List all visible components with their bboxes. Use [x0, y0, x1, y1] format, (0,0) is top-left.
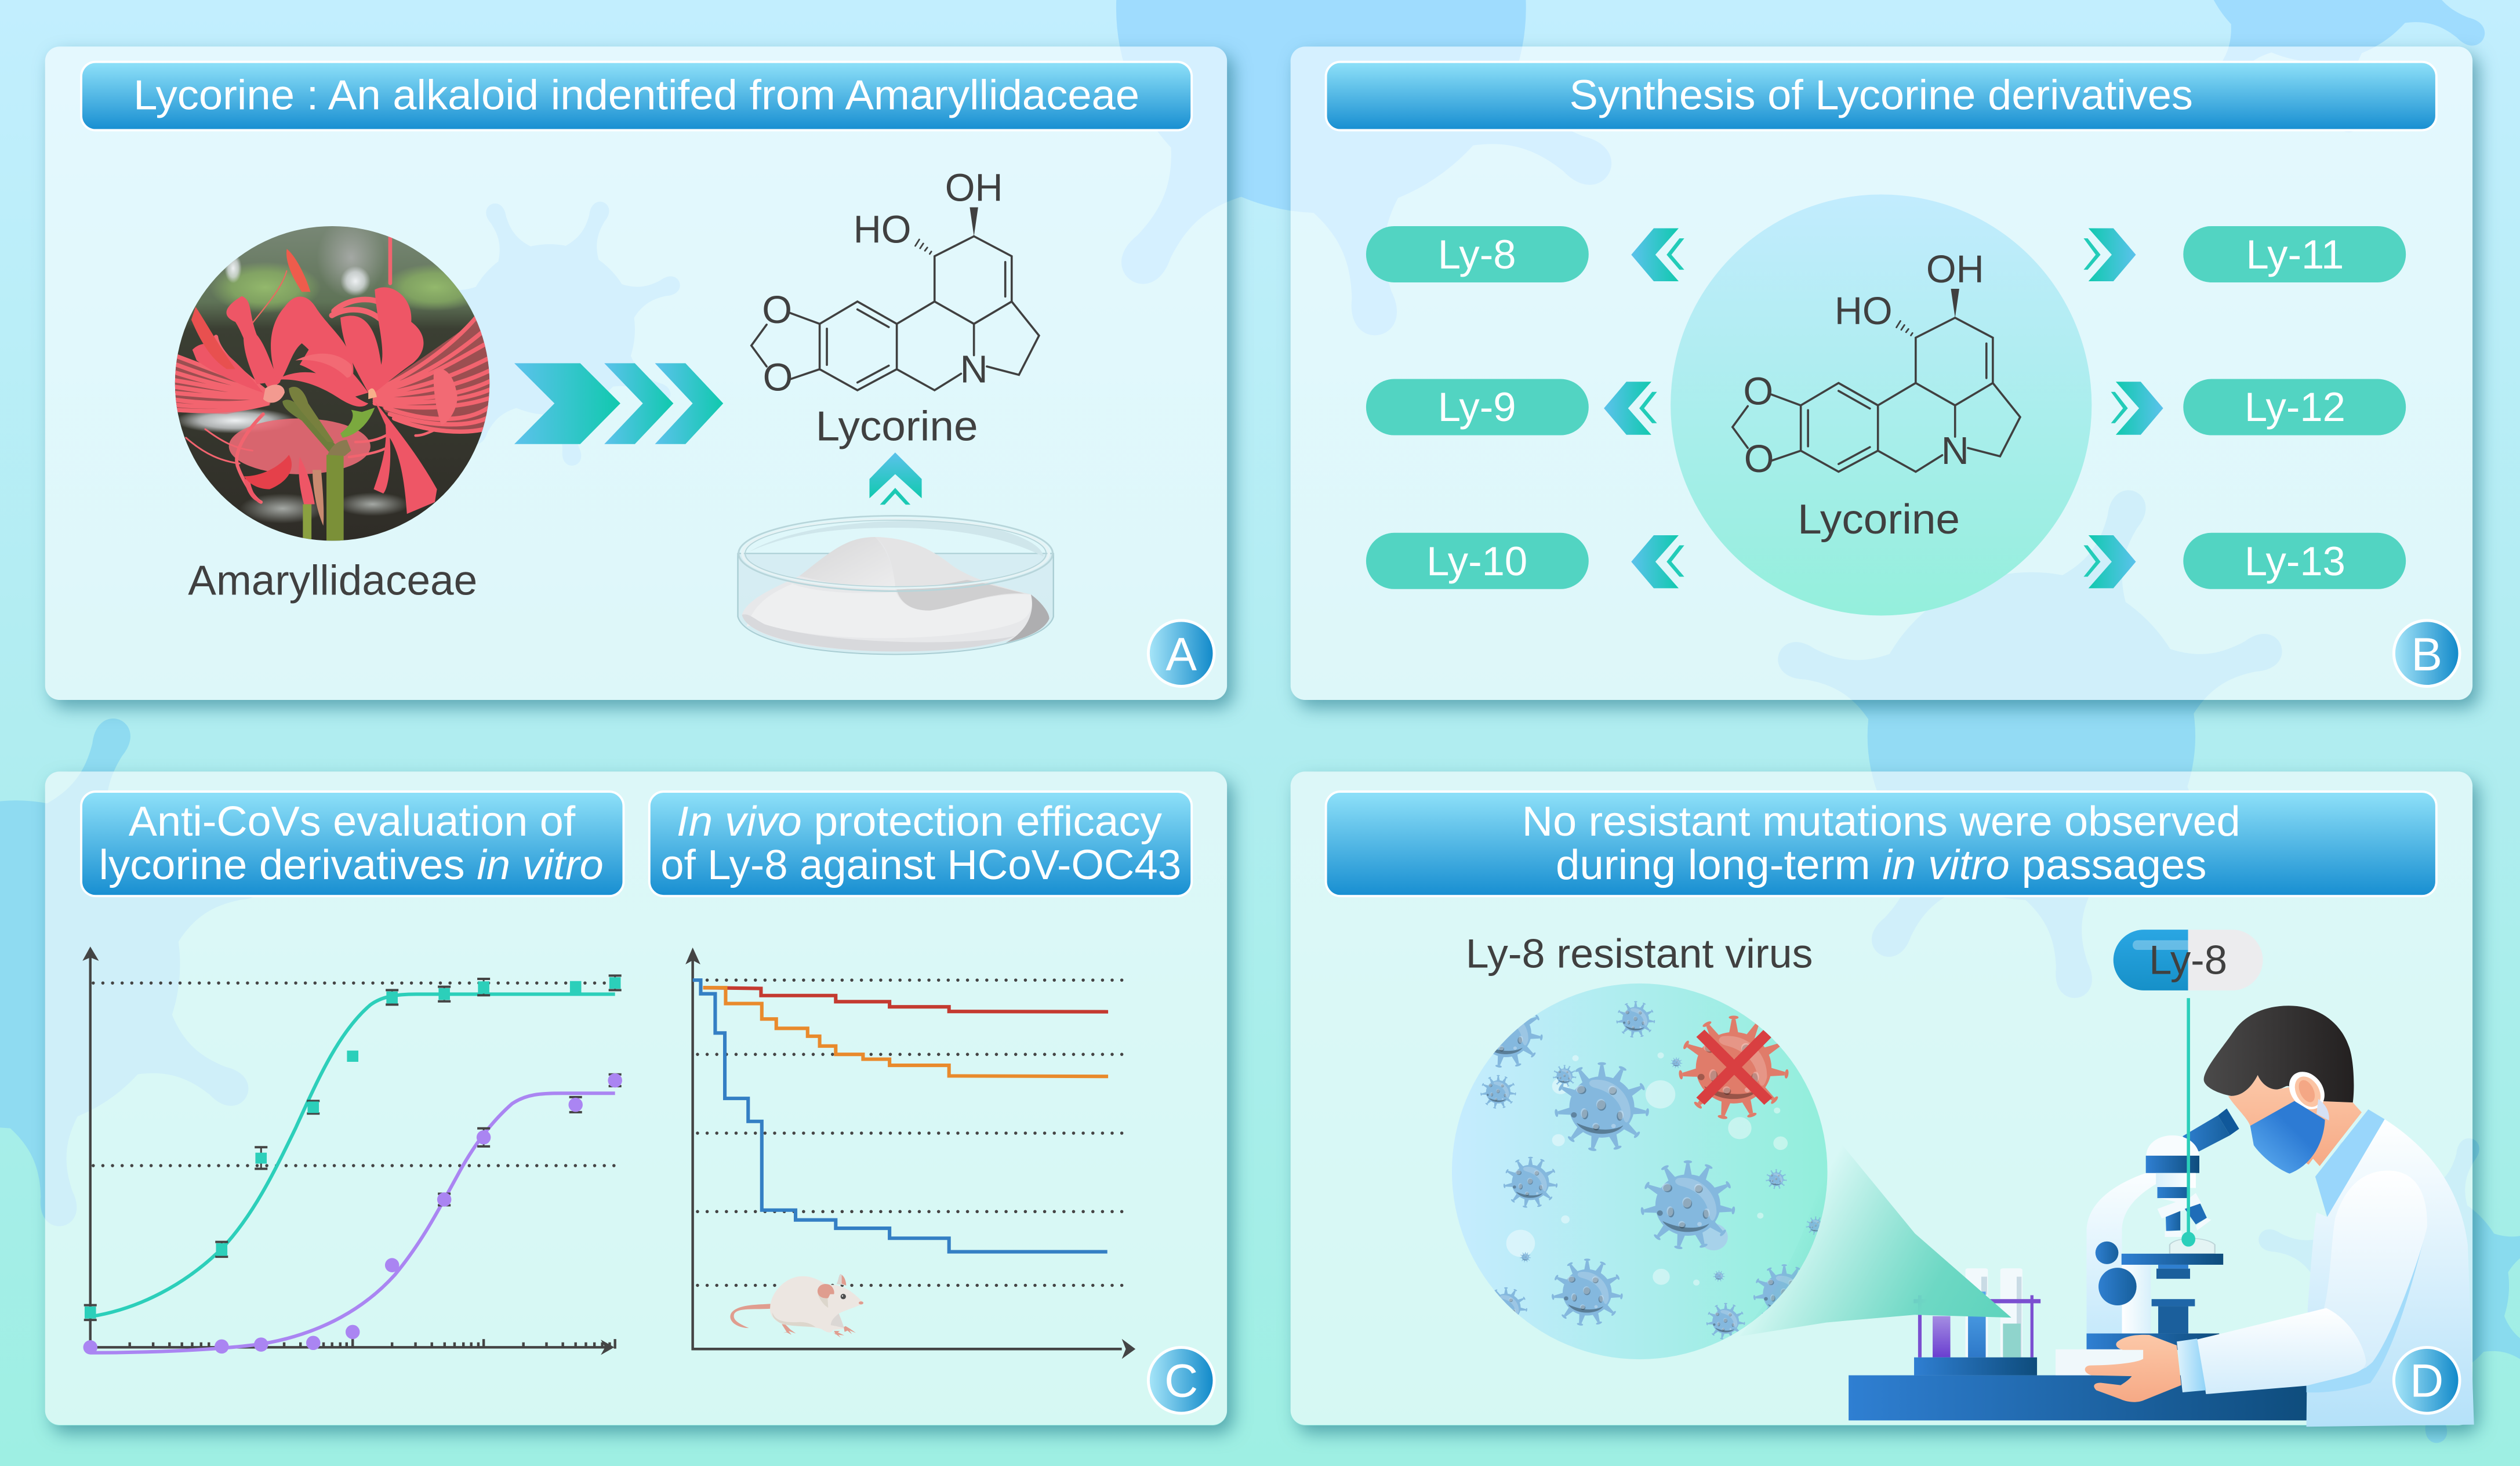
lycorine circle: Lycorine [1798, 496, 1960, 543]
panel B: Synthesis of Lycorine derivatives [1291, 46, 2472, 700]
panel A: Lycorine identified from Amaryllidaceae [45, 46, 1227, 700]
label: Amaryllidaceae: Amaryllidaceae [188, 558, 477, 604]
heading D: No resistant mutations were observed [1522, 799, 2241, 845]
badge D: D [2410, 1355, 2443, 1407]
pill Ly-11: Ly-11 [2246, 231, 2344, 277]
panel D shadow [1291, 772, 2472, 1425]
icon: petri dish with white powder [738, 516, 1054, 654]
heading C right: In vivo protection efficacy [677, 799, 1162, 845]
heading C right: of Ly-8 against HCoV-OC43 [660, 842, 1181, 888]
badge A [1148, 620, 1214, 686]
heading C left: lycorine derivatives in vitro [99, 842, 604, 888]
microscope and scientist illustration [1849, 1006, 2474, 1427]
icon: mouse [730, 1274, 863, 1338]
badge C [1148, 1347, 1214, 1413]
pill Ly-9: Ly-9 [1438, 384, 1516, 430]
pill Ly-10: Ly-10 [1426, 538, 1527, 584]
badge C: C [1164, 1355, 1198, 1407]
heading C left: Anti-CoVs evaluation of [129, 799, 576, 845]
scientist [2056, 1006, 2474, 1427]
chart: dose-response curves [82, 946, 622, 1355]
pill Ly-10 [1366, 533, 1589, 589]
heading B [1326, 62, 2437, 130]
arrow to Ly-8 [1631, 228, 1684, 281]
lycorine circle: HO [1835, 290, 1893, 333]
pill Ly-12 [2183, 379, 2406, 436]
lycorine circle: N [1941, 430, 1969, 473]
panel B shadow [1291, 46, 2472, 700]
pill Ly-8: Ly-8 [1438, 231, 1516, 277]
lycorine structure: HO [854, 209, 912, 252]
lycorine structure: O [763, 357, 793, 400]
heading B: Synthesis of Lycorine derivatives [1570, 72, 2193, 118]
arrow: three chevrons to lycorine [514, 363, 723, 444]
heading A: Lycorine : An alkaloid indentifed from Amaryllidaceae [133, 72, 1139, 118]
lycorine circle: O [1743, 371, 1773, 413]
panel C: in vitro and in vivo evaluation [45, 771, 1227, 1425]
lycorine structure: O [762, 289, 792, 332]
heading D [1326, 792, 2437, 896]
heading D: during long-term in vitro passages [1556, 842, 2206, 888]
badge D [2394, 1347, 2460, 1413]
panel D: no resistant mutations [1291, 771, 2474, 1427]
arrow to Ly-11 [2083, 228, 2136, 281]
lycorine structure: N [960, 349, 988, 391]
microscope [2086, 1108, 2239, 1350]
Ly-8 capsule and drop line [2114, 930, 2263, 1247]
cone from microscope to lens [1739, 1126, 2011, 1337]
icon: red virus with cross [1678, 1015, 1789, 1120]
label: Ly-8 resistant virus: Ly-8 resistant virus [1466, 931, 1813, 977]
chart: survival curves [685, 948, 1135, 1359]
arrow to Ly-9 [1604, 382, 1657, 435]
panel C shadow [45, 772, 1227, 1425]
Ly-8 capsule and drop line: Ly-8 [2149, 937, 2227, 983]
lycorine structure [751, 166, 1039, 400]
flower photo [175, 226, 489, 540]
arrow to Ly-13 [2083, 535, 2136, 588]
lycorine circle [1671, 194, 2091, 616]
heading C right [649, 792, 1192, 896]
lycorine circle: O [1744, 438, 1774, 481]
badge B: B [2411, 629, 2442, 681]
pill Ly-11 [2183, 226, 2406, 282]
pill Ly-13 [2183, 533, 2406, 589]
pill Ly-13: Ly-13 [2245, 538, 2345, 584]
table [1849, 1376, 2313, 1420]
badge B [2394, 620, 2460, 686]
panel A shadow [45, 46, 1227, 700]
pill Ly-12: Ly-12 [2245, 384, 2345, 430]
arrow to Ly-10 [1631, 535, 1684, 588]
test tube rack [1913, 1268, 2040, 1376]
label: Lycorine: Lycorine [816, 403, 978, 449]
heading C left [81, 792, 623, 896]
arrow: up chevrons [869, 452, 922, 505]
lycorine structure: OH [945, 166, 1003, 209]
magnified view: viruses [1452, 984, 1828, 1359]
arrow to Ly-12 [2111, 382, 2163, 435]
badge A: A [1165, 629, 1197, 681]
heading A [81, 62, 1192, 130]
lycorine circle: OH [1926, 248, 1984, 291]
pill Ly-8 [1366, 226, 1589, 282]
pill Ly-9 [1366, 379, 1589, 436]
